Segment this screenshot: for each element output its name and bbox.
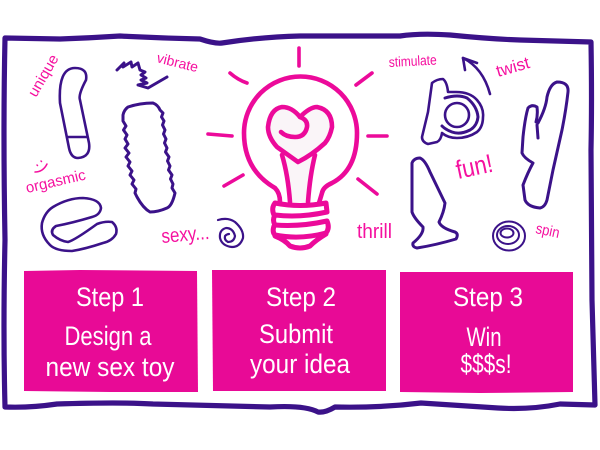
panel: step 1: [24, 270, 198, 392]
label: thrill: thrill: [357, 221, 392, 243]
heart: [268, 107, 332, 162]
panel: step 2: [212, 270, 386, 391]
label: orgasmic: orgasmic: [24, 167, 88, 197]
icon: ribbed toy: [123, 103, 175, 212]
step 1 text line 2: new sex toy: [46, 352, 175, 382]
icon: anal plug: [412, 158, 457, 248]
step 2 text line 2: your idea: [250, 349, 351, 379]
label: unique: unique: [25, 52, 62, 100]
bulb fill: heart and stem: [268, 107, 332, 202]
icon: curved vibrator: [60, 68, 89, 158]
icon: rabbit toy: [522, 82, 568, 208]
label: fun: fun!: [453, 148, 495, 185]
icon: couples toy: [42, 198, 116, 251]
step 1 text line 1: Design a: [64, 321, 152, 351]
icon: spinning toy: [493, 222, 525, 250]
filament right: [308, 155, 315, 202]
icon: smiley: [35, 161, 47, 172]
step 2 text line 1: Submit: [259, 319, 333, 349]
lightbulb rays: [208, 48, 387, 194]
arrow: curved up-left: [463, 58, 490, 94]
label: spin: spin: [534, 220, 561, 242]
step 3 heading: Step 3: [453, 282, 523, 312]
label: stimulate: stimulate: [388, 51, 437, 70]
step 1 heading: Step 1: [76, 282, 144, 312]
step 1 background: [24, 270, 198, 392]
screw base: [273, 203, 328, 248]
label: sexy: sexy...: [161, 222, 210, 248]
icon: light bulb with heart: [244, 76, 357, 248]
bulb glass: [244, 76, 357, 203]
icon: spiral: [218, 219, 243, 247]
step 3 text line 2: $$$s!: [460, 349, 512, 379]
icon: ring toy: [422, 79, 483, 144]
filament: [282, 155, 290, 202]
icon: vibrate zigzag: [117, 62, 167, 88]
label: twist: twist: [494, 53, 532, 81]
step 2 heading: Step 2: [266, 282, 336, 312]
step 3 text line 1: Win: [466, 322, 502, 352]
panel: step 3: [400, 272, 573, 393]
step 2 background: [212, 270, 386, 391]
heart spiral: [281, 117, 307, 137]
label: vibrate: vibrate: [155, 49, 200, 75]
step 3 background: [400, 272, 573, 393]
